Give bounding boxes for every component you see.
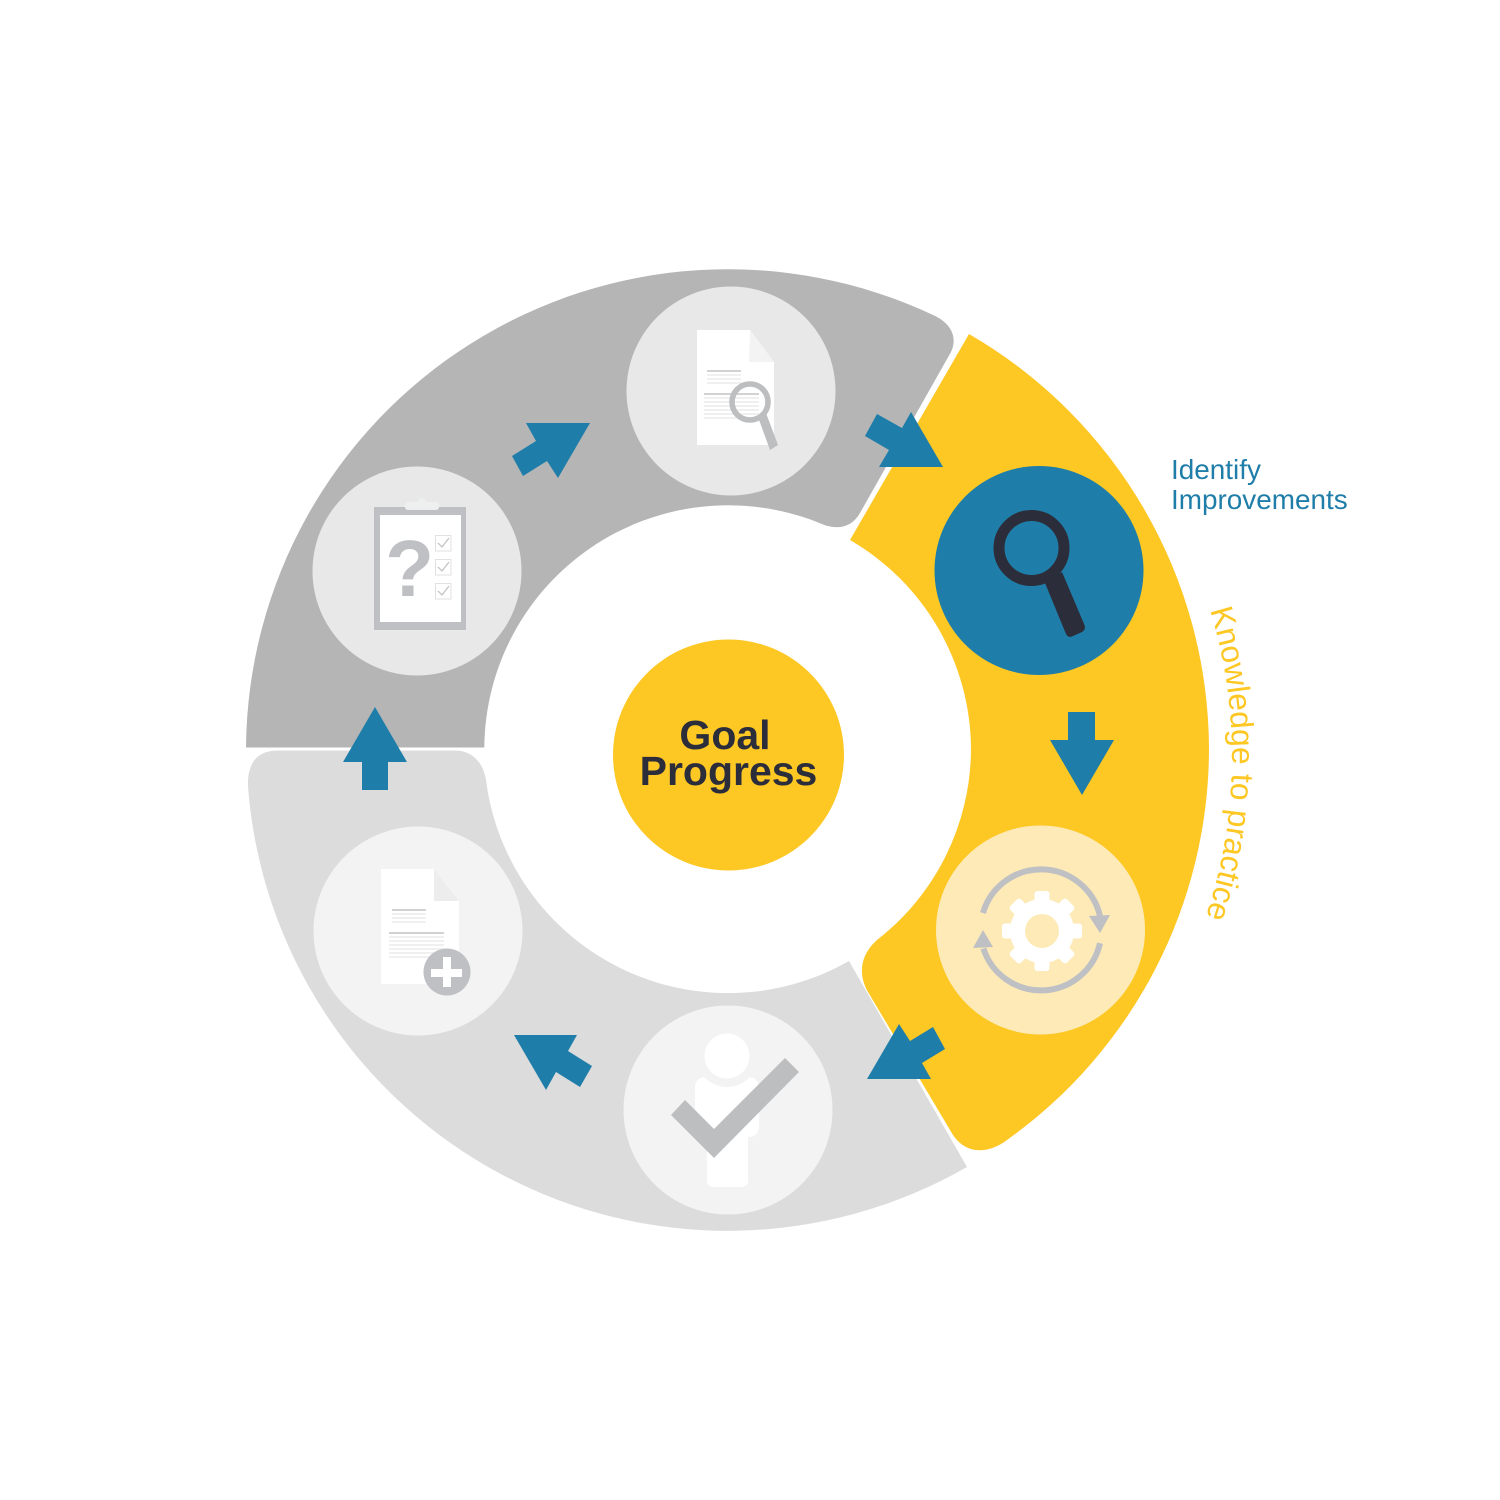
step: gear and cycle arrows icon xyxy=(936,826,1145,1034)
arrow: person to add document xyxy=(514,1035,592,1090)
label: Identify Improvements: Improvements xyxy=(1171,484,1348,515)
arrow: gear to person xyxy=(867,1024,945,1079)
step: person with check mark icon xyxy=(624,1006,832,1214)
centre label: Goal Progress: Goal xyxy=(679,712,771,758)
panel: light grey ring segment xyxy=(248,750,967,1231)
question mark: ? xyxy=(385,524,434,613)
curved label: Knowledge to practice: Knowledge to practice xyxy=(1208,606,1254,919)
step: add document icon xyxy=(314,826,522,1036)
step: questionnaire clipboard icon xyxy=(312,466,522,676)
panel: dark grey ring segment xyxy=(246,269,954,748)
centre circle xyxy=(613,640,844,870)
arrow: questionnaire to document review xyxy=(512,423,590,478)
arrow: add document to questionnaire xyxy=(343,707,407,790)
arrow: document review to identify improvements xyxy=(865,412,943,467)
step: identify improvements magnifier icon xyxy=(934,466,1144,675)
label: Identify Improvements: Identify xyxy=(1171,454,1261,485)
step: document review icon xyxy=(626,286,836,496)
panel: yellow ring segment xyxy=(850,334,1209,1150)
arrow: identify improvements to gear xyxy=(1050,712,1114,795)
centre label: Goal Progress: Progress xyxy=(640,748,817,794)
